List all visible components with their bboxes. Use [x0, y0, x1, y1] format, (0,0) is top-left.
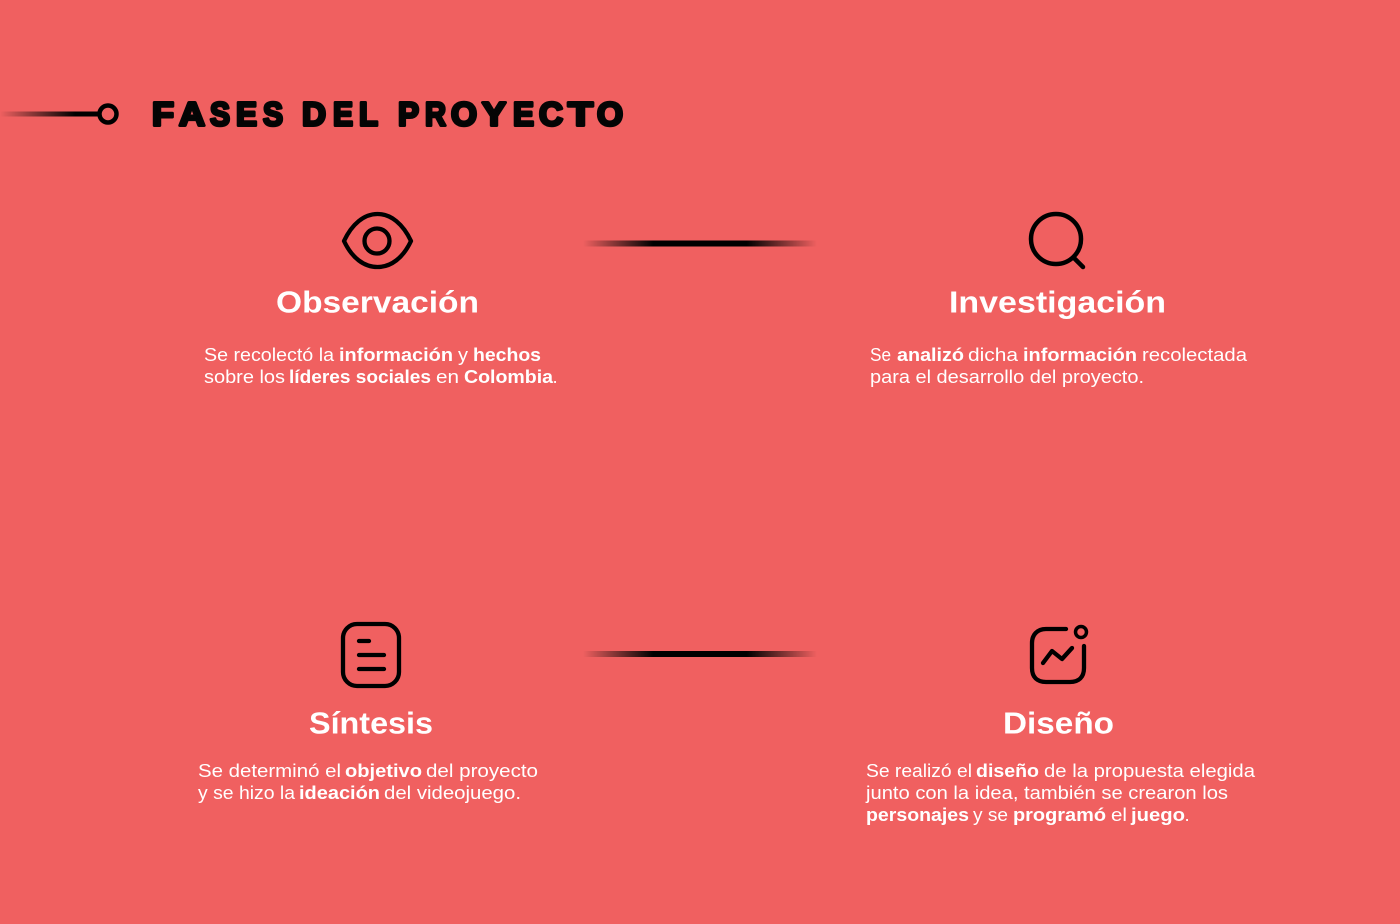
heading: Síntesis: Síntesis: [309, 706, 433, 740]
heading: Investigación: Investigación: [949, 284, 1166, 320]
icon: eye: [344, 214, 411, 267]
connector top: [583, 240, 817, 246]
title: E: [236, 96, 257, 132]
text: Diseño description: y se: [973, 804, 1008, 825]
text: Diseño description: el: [1111, 804, 1127, 825]
text: Diseño description: junto con la idea, también se crearon los: [865, 782, 1228, 803]
panel: Investigación: [870, 214, 1252, 387]
text: Diseño description: Se realizó el: [866, 760, 972, 781]
text: Observación description: Colombia: [464, 366, 554, 387]
text: Investigación description: dicha: [968, 344, 1019, 365]
title: L: [359, 96, 378, 132]
text: Síntesis description: Se determinó el: [198, 760, 341, 781]
connector bottom: [583, 651, 817, 657]
title: P: [398, 96, 419, 132]
text: Investigación description: recolectada: [1142, 344, 1248, 365]
text: Síntesis description: y se hizo la: [198, 782, 296, 803]
text: Investigación description: Se: [870, 344, 891, 365]
title: S: [263, 96, 283, 132]
panel: Diseño: [865, 626, 1260, 825]
title: A: [179, 96, 205, 132]
icon: magnifier: [1031, 214, 1083, 267]
title: O: [451, 96, 477, 132]
text: Investigación description: analizó: [897, 344, 964, 365]
text: Observación description: y: [458, 344, 469, 365]
text: Observación description: Se recolectó la: [204, 344, 335, 365]
heading: Observación: Observación: [276, 284, 479, 320]
text: Síntesis description: del videojuego.: [384, 782, 521, 803]
text: Observación description: líderes sociales: [289, 366, 431, 387]
title: O: [597, 96, 623, 132]
title: S: [210, 96, 230, 132]
icon: chart card: [1032, 626, 1086, 682]
text: Diseño description: juego: [1130, 804, 1185, 825]
text: Observación description: .: [552, 366, 558, 387]
title: E: [333, 96, 353, 132]
text: Observación description: hechos: [473, 344, 541, 365]
text: Diseño description: de la propuesta elegida: [1044, 760, 1256, 781]
text: Diseño description: .: [1184, 804, 1190, 825]
icon: document list: [343, 624, 399, 686]
title: E: [513, 96, 534, 132]
text: Investigación description: información: [1023, 344, 1137, 365]
text: Síntesis description: objetivo: [345, 760, 422, 781]
text: Diseño description: diseño: [976, 760, 1039, 781]
title: R: [425, 96, 446, 132]
title: D: [302, 96, 326, 132]
title marker line: [0, 106, 116, 122]
text: Diseño description: programó: [1013, 804, 1106, 825]
heading: Diseño: Diseño: [1003, 706, 1114, 740]
title: Y: [482, 96, 506, 132]
text: Diseño description: personajes: [866, 804, 969, 825]
text: Observación description: información: [339, 344, 453, 365]
text: Síntesis description: del proyecto: [426, 760, 538, 781]
text: Investigación description: para el desarrollo del proyecto.: [870, 366, 1144, 387]
text: Observación description: en: [436, 366, 459, 387]
text: Síntesis description: ideación: [299, 782, 380, 803]
title: C: [539, 96, 563, 132]
title: T: [568, 96, 593, 132]
text: Observación description: sobre los: [204, 366, 285, 387]
title: F: [152, 96, 174, 132]
panel: Observación: [204, 214, 558, 387]
panel: Síntesis: [198, 624, 543, 803]
